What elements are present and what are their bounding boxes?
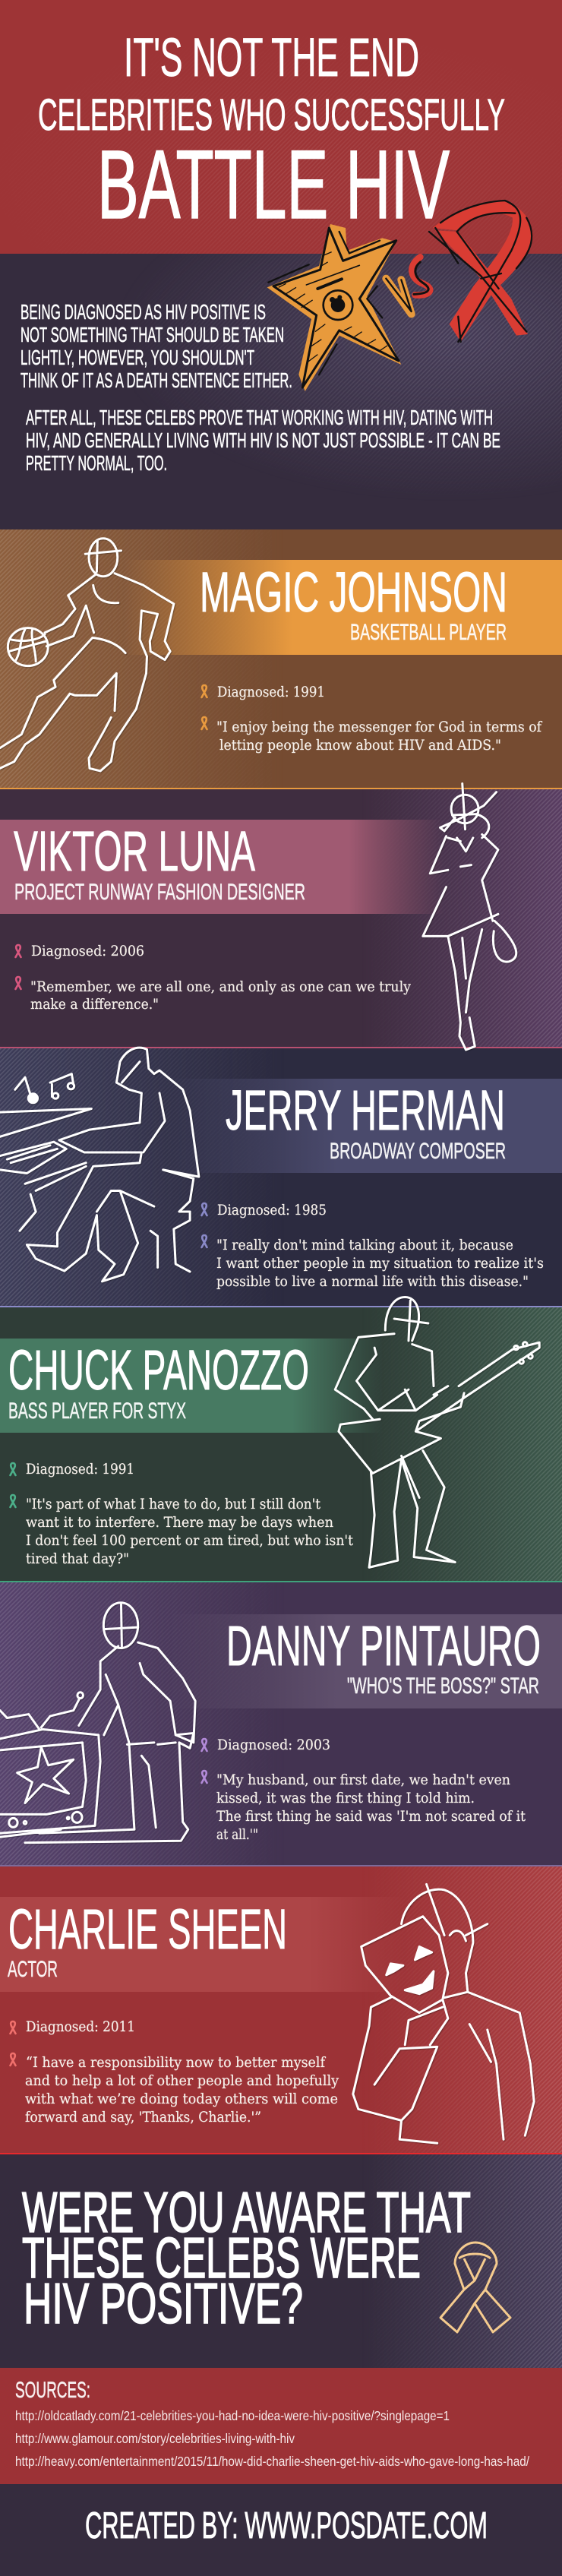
quote: "Remember, we are all one, and only as one can we truly [30, 978, 411, 995]
intro paragraph one: NOT SOMETHING THAT SHOULD BE TAKEN [21, 323, 284, 346]
name: Viktor Luna: VIKTOR LUNA [14, 820, 255, 883]
quote: with what we’re doing today others will come [25, 2091, 338, 2107]
diagnosis year: Diagnosed: 2006 [31, 943, 144, 959]
intro paragraph two: PRETTY NORMAL, TOO. [26, 451, 167, 475]
icon: awareness ribbon [440, 2243, 510, 2332]
icon: green ribbon [11, 1463, 15, 1475]
quote: want it to interfere. There may be days when [26, 1514, 333, 1531]
panel: Magic Johnson [0, 529, 562, 789]
quote [216, 719, 543, 754]
quote: at all.'" [216, 1826, 258, 1843]
icon: periwinkle ribbon [202, 1235, 207, 1247]
icon: orange ribbon [202, 717, 207, 729]
icon: lilac ribbon [202, 1771, 207, 1783]
panel: Chuck Panozzo [0, 1297, 562, 1582]
role: BASS PLAYER FOR STYX [8, 1399, 186, 1424]
icon: coral ribbon [11, 2021, 15, 2034]
source links: http://www.glamour.com/story/celebrities-living-with-hiv [15, 2431, 295, 2446]
icon: pink ribbon [15, 977, 21, 989]
intro paragraph one: LIGHTLY, HOWEVER, YOU SHOULDN'T [21, 346, 254, 369]
icon: periwinkle ribbon [202, 1203, 207, 1215]
quote: and to help a lot of other people and hopefully [25, 2072, 339, 2089]
icon: coral ribbon [11, 2053, 15, 2066]
quote: letting people know about HIV and AIDS." [219, 737, 501, 754]
role: PROJECT RUNWAY FASHION DESIGNER [14, 880, 305, 905]
figure: TV star [0, 1603, 195, 1843]
icon: red AIDS ribbon [429, 201, 533, 342]
name band [0, 1897, 562, 1992]
panel: introduction [21, 199, 562, 473]
diagnosis year: Diagnosed: 1991 [26, 1461, 134, 1478]
sources heading: SOURCES: [15, 2378, 90, 2403]
quote: “I have a responsibility now to better myself [26, 2054, 327, 2071]
name band [0, 820, 562, 914]
quote: "My husband, our first date, we hadn't even [216, 1772, 510, 1788]
closing heading: HIV POSITIVE? [24, 2271, 303, 2335]
figure: fashion designer [423, 783, 516, 1050]
quote: forward and say, 'Thanks, Charlie.'” [25, 2109, 261, 2126]
intro paragraph one: BEING DIAGNOSED AS HIV POSITIVE IS [21, 300, 266, 324]
name band [0, 1079, 562, 1173]
quote: The first thing he said was 'I'm not scared of it [216, 1808, 526, 1825]
icon: hollywood star [267, 224, 401, 391]
quote: I don't feel 100 percent or am tired, but who isn't [26, 1532, 353, 1549]
quote: kissed, it was the first thing I told him. [216, 1790, 475, 1806]
icon: vs lettering [386, 257, 430, 314]
quote [216, 1772, 526, 1843]
name band [0, 1339, 562, 1433]
intro paragraph one: THINK OF IT AS A DEATH SENTENCE EITHER. [21, 368, 292, 392]
quote: possible to live a normal life with this disease." [216, 1273, 529, 1290]
diagnosis year: Diagnosed: 1991 [217, 684, 325, 700]
icon: orange ribbon [202, 685, 207, 697]
quote: "I really don't mind talking about it, because [216, 1237, 513, 1253]
quote [30, 978, 411, 1013]
quote: "It's part of what I have to do, but I still don't [26, 1496, 320, 1512]
diagnosis year: Diagnosed: 2003 [217, 1737, 330, 1753]
intro paragraph two [26, 406, 500, 475]
figure: pianist [0, 1048, 199, 1282]
source links [15, 2408, 529, 2469]
name band [0, 560, 562, 655]
figure: actor with comedy mask [353, 1884, 534, 2143]
diagnosis year: Diagnosed: 1985 [217, 1202, 327, 1218]
quote: make a difference." [30, 996, 159, 1013]
icon: lilac ribbon [202, 1739, 207, 1751]
name: Charlie Sheen: CHARLIE SHEEN [8, 1898, 287, 1961]
icon: green ribbon [11, 1495, 15, 1507]
role: ACTOR [8, 1957, 58, 1982]
panel: Charlie Sheen [0, 1866, 562, 2154]
quote [25, 2054, 339, 2126]
source links: http://oldcatlady.com/21-celebrities-you-had-no-idea-were-hiv-positive/?singlepage=1 [15, 2408, 450, 2423]
panel: title header [0, 0, 562, 254]
panel: closing question [0, 2154, 562, 2368]
intro paragraph one [21, 300, 292, 392]
quote [26, 1496, 353, 1567]
panel: Danny Pintauro [0, 1582, 562, 1866]
panel: Viktor Luna [0, 789, 562, 1048]
diagnosis year: Diagnosed: 2011 [26, 2018, 135, 2035]
name: Chuck Panozzo: CHUCK PANOZZO [8, 1339, 309, 1402]
panel: sources [0, 2368, 562, 2484]
panel: Jerry Herman [0, 1048, 562, 1307]
figure: basketball player [0, 539, 174, 771]
icon: pink ribbon [15, 945, 21, 957]
figure: bass player [335, 1297, 539, 1567]
panel: footer credit [0, 2484, 562, 2576]
closing heading [22, 2180, 471, 2335]
name band [0, 1614, 562, 1708]
quote [216, 1237, 544, 1290]
quote: tired that day?" [26, 1550, 129, 1567]
